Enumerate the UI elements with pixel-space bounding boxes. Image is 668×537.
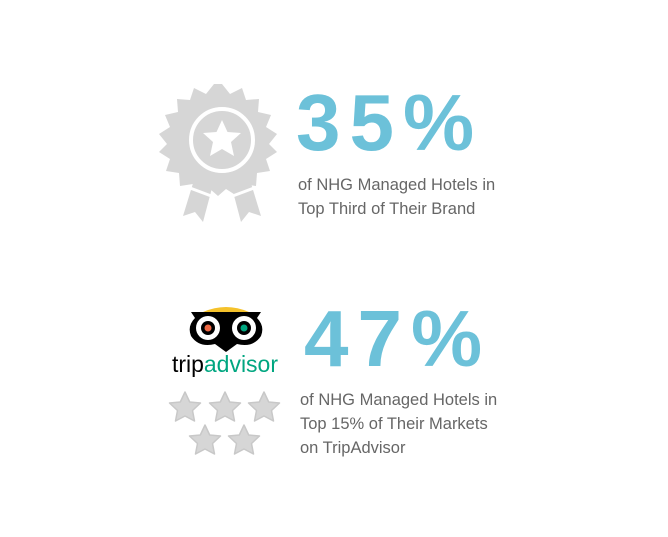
text: 47% description: Top 15% of Their Markets <box>300 415 488 433</box>
text: 35% description <box>298 176 495 218</box>
ribbons <box>183 180 212 222</box>
logo: tripadvisor <box>172 307 278 377</box>
text: 35% description: of NHG Managed Hotels in <box>298 176 495 194</box>
text: 47% description: on TripAdvisor <box>300 439 405 457</box>
stat: 47%: 47% <box>304 294 491 383</box>
stat: 35%: 35% <box>296 78 483 167</box>
icon: five stars <box>168 391 280 455</box>
logo: tripadvisor: tripadvisor <box>172 351 278 377</box>
text: 35% description: Top Third of Their Brand <box>298 200 475 218</box>
text: 47% description: of NHG Managed Hotels in <box>300 391 497 409</box>
text: 47% description <box>300 391 497 457</box>
